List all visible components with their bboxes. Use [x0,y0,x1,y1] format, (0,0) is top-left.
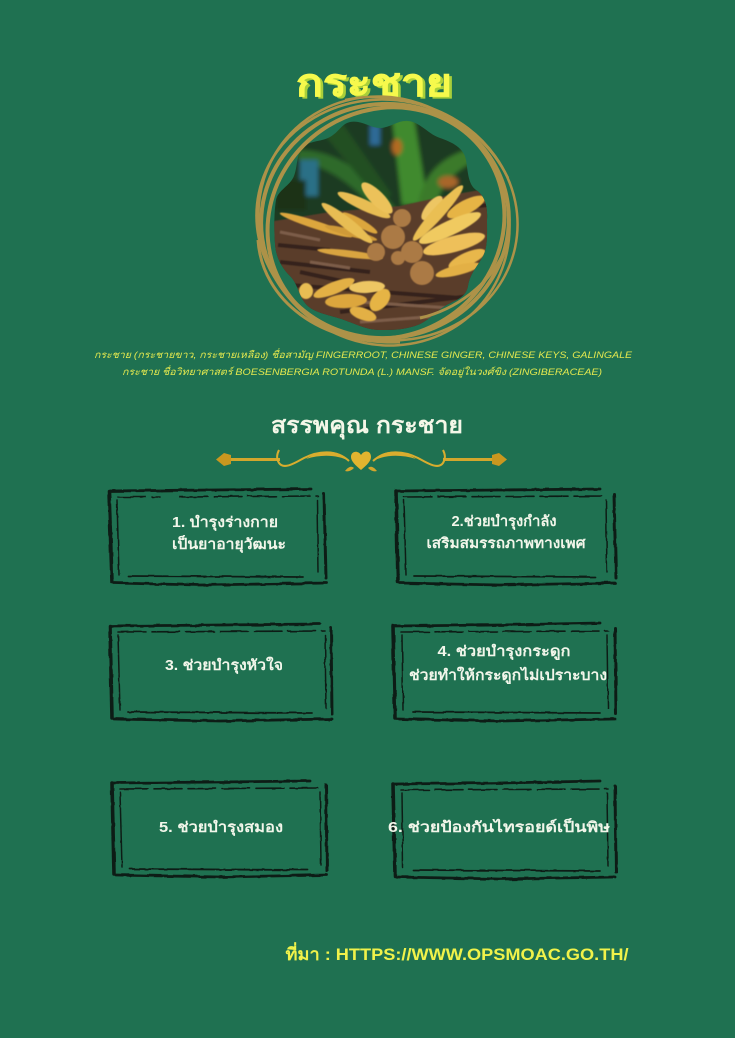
benefit card 1: 1. บำรุงร่างกาย [172,514,278,531]
rough frame 4 [393,623,616,721]
rough frame 1 [109,489,327,585]
rough frame 3 [110,624,332,721]
sliced pieces [298,277,391,322]
benefit card 2: เสริมสมรรถภาพทางเพศ [426,535,586,552]
photo background foliage [274,120,488,330]
benefit card 4: 4. ช่วยบำรุงกระดูก [438,643,570,660]
source credit: ที่มา : HTTPS://WWW.OPSMOAC.GO.TH/ [286,942,629,964]
wooden log [274,190,488,330]
rough frame 2 [396,489,616,585]
title: กระชาย [299,64,455,107]
right bundle of rhizomes [412,184,486,278]
description: กระชาย ชื่อวิทยาศาสตร์ BOESENBERGIA ROTUNDA (L.) MANSF. จัดอยู่ในวงศ์ขิง (ZINGIBERACEAE) [122,365,602,378]
left bundle of rhizomes [279,178,397,261]
title: กระชาย [296,62,452,105]
description [94,348,633,378]
benefit card 1 [109,489,327,585]
benefit card 6 [388,781,616,879]
benefit card 4: ช่วยทำให้กระดูกไม่เปราะบาง [409,666,607,684]
benefit card 4 [393,623,616,721]
description: กระชาย (กระชายขาว, กระชายเหลือง) ชื่อสามัญ FINGERROOT, CHINESE GINGER, CHINESE KEYS, GALINGALE [94,348,633,361]
benefit card 3: 3. ช่วยบำรุงหัวใจ [165,656,283,674]
benefit card 5: 5. ช่วยบำรุงสมอง [159,819,283,836]
gold ornament divider [216,450,507,471]
photo of fingerroot in scalloped frame [274,120,488,330]
gold scribble ring [208,45,560,397]
rough frame 5 [112,781,327,877]
benefit card 6: 6. ช่วยป้องกันไทรอยด์เป็นพิษ [388,817,611,836]
section heading: สรรพคุณ กระชาย [271,412,463,440]
benefit card 1: เป็นยาอายุวัฒนะ [172,534,286,553]
rough frame 6 [393,781,616,879]
rhizome knobs [367,209,434,285]
benefit card 2 [396,489,616,585]
benefit card 2: 2.ช่วยบำรุงกำลัง [452,513,556,530]
